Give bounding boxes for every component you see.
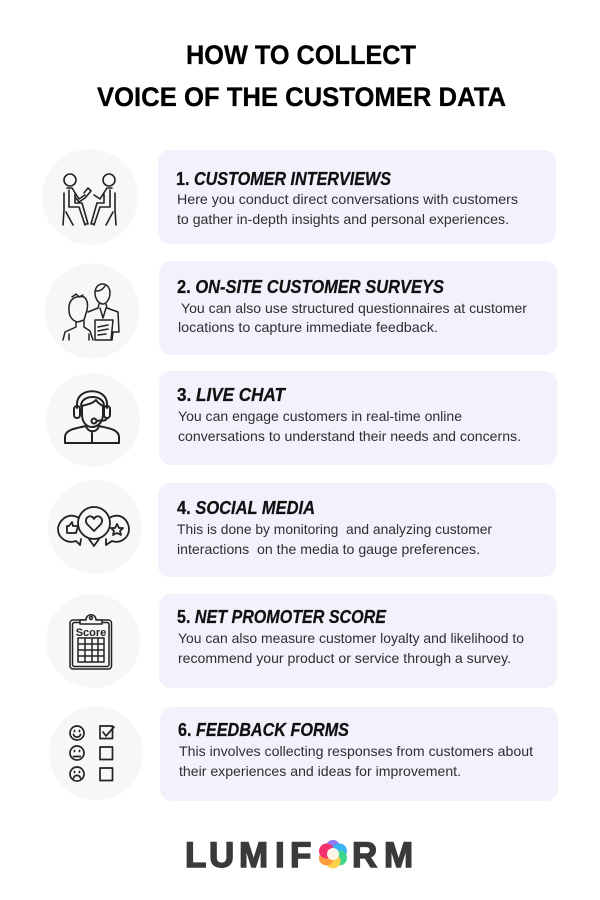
row 4: social media bbox=[48, 480, 556, 577]
card 6: This involves collecting responses from customers about bbox=[179, 743, 533, 759]
card 3: You can engage customers in real-time online bbox=[178, 408, 462, 424]
row 6: feedback forms bbox=[49, 706, 558, 801]
card 5: recommend your product or service through a survey. bbox=[178, 650, 511, 666]
card 5: You can also measure customer loyalty and likelihood to bbox=[178, 630, 524, 646]
card 2 bbox=[159, 261, 557, 355]
row 1: customer interviews bbox=[42, 149, 556, 245]
card 3: 3. LIVE CHAT bbox=[177, 385, 287, 405]
card 5 bbox=[159, 594, 557, 688]
icon: score clipboard: Score bbox=[76, 627, 106, 639]
icon: colorful logo flower bbox=[319, 840, 347, 868]
card 1 bbox=[158, 150, 556, 244]
logo: Lumiform bbox=[185, 836, 413, 875]
card 2: locations to capture immediate feedback. bbox=[178, 319, 438, 335]
card 2: You can also use structured questionnaires at customer bbox=[181, 300, 527, 316]
card 1: 1. CUSTOMER INTERVIEWS bbox=[176, 169, 391, 189]
logo: Lumiform: LUMIF bbox=[185, 836, 311, 875]
row 5: net promoter score bbox=[46, 594, 557, 688]
card 3 bbox=[159, 371, 557, 465]
card 6: 6. FEEDBACK FORMS bbox=[178, 720, 349, 740]
card 6: their experiences and ideas for improvement. bbox=[179, 763, 461, 779]
card 4 bbox=[158, 483, 556, 577]
card 5: 5. NET PROMOTER SCORE bbox=[177, 607, 387, 627]
icon: two people in interview bbox=[42, 149, 138, 245]
row 3: live chat bbox=[46, 371, 557, 467]
title: HOW TO COLLECT bbox=[186, 40, 416, 70]
icon: score clipboard bbox=[46, 594, 140, 688]
card 2: 2. ON-SITE CUSTOMER SURVEYS bbox=[177, 277, 444, 297]
card 1: to gather in-depth insights and personal experiences. bbox=[177, 211, 509, 227]
card 4: 4. SOCIAL MEDIA bbox=[177, 498, 315, 518]
icon: smileys and checkboxes bbox=[49, 706, 143, 800]
icon: headset agent bbox=[46, 373, 140, 467]
row 2: on-site customer surveys bbox=[44, 261, 557, 358]
icon: surveyor and customer bbox=[44, 264, 140, 358]
icon: social reaction bubbles bbox=[48, 480, 142, 574]
card 4: This is done by monitoring and analyzing customer bbox=[177, 521, 492, 537]
title: VOICE OF THE CUSTOMER DATA bbox=[97, 82, 506, 112]
logo: Lumiform: RM bbox=[352, 836, 413, 875]
card 6 bbox=[160, 707, 558, 801]
card 4: interactions on the media to gauge preferences. bbox=[177, 541, 480, 557]
card 3: conversations to understand their needs and concerns. bbox=[178, 428, 521, 444]
title bbox=[97, 40, 506, 112]
card 1: Here you conduct direct conversations with customers bbox=[177, 191, 518, 207]
